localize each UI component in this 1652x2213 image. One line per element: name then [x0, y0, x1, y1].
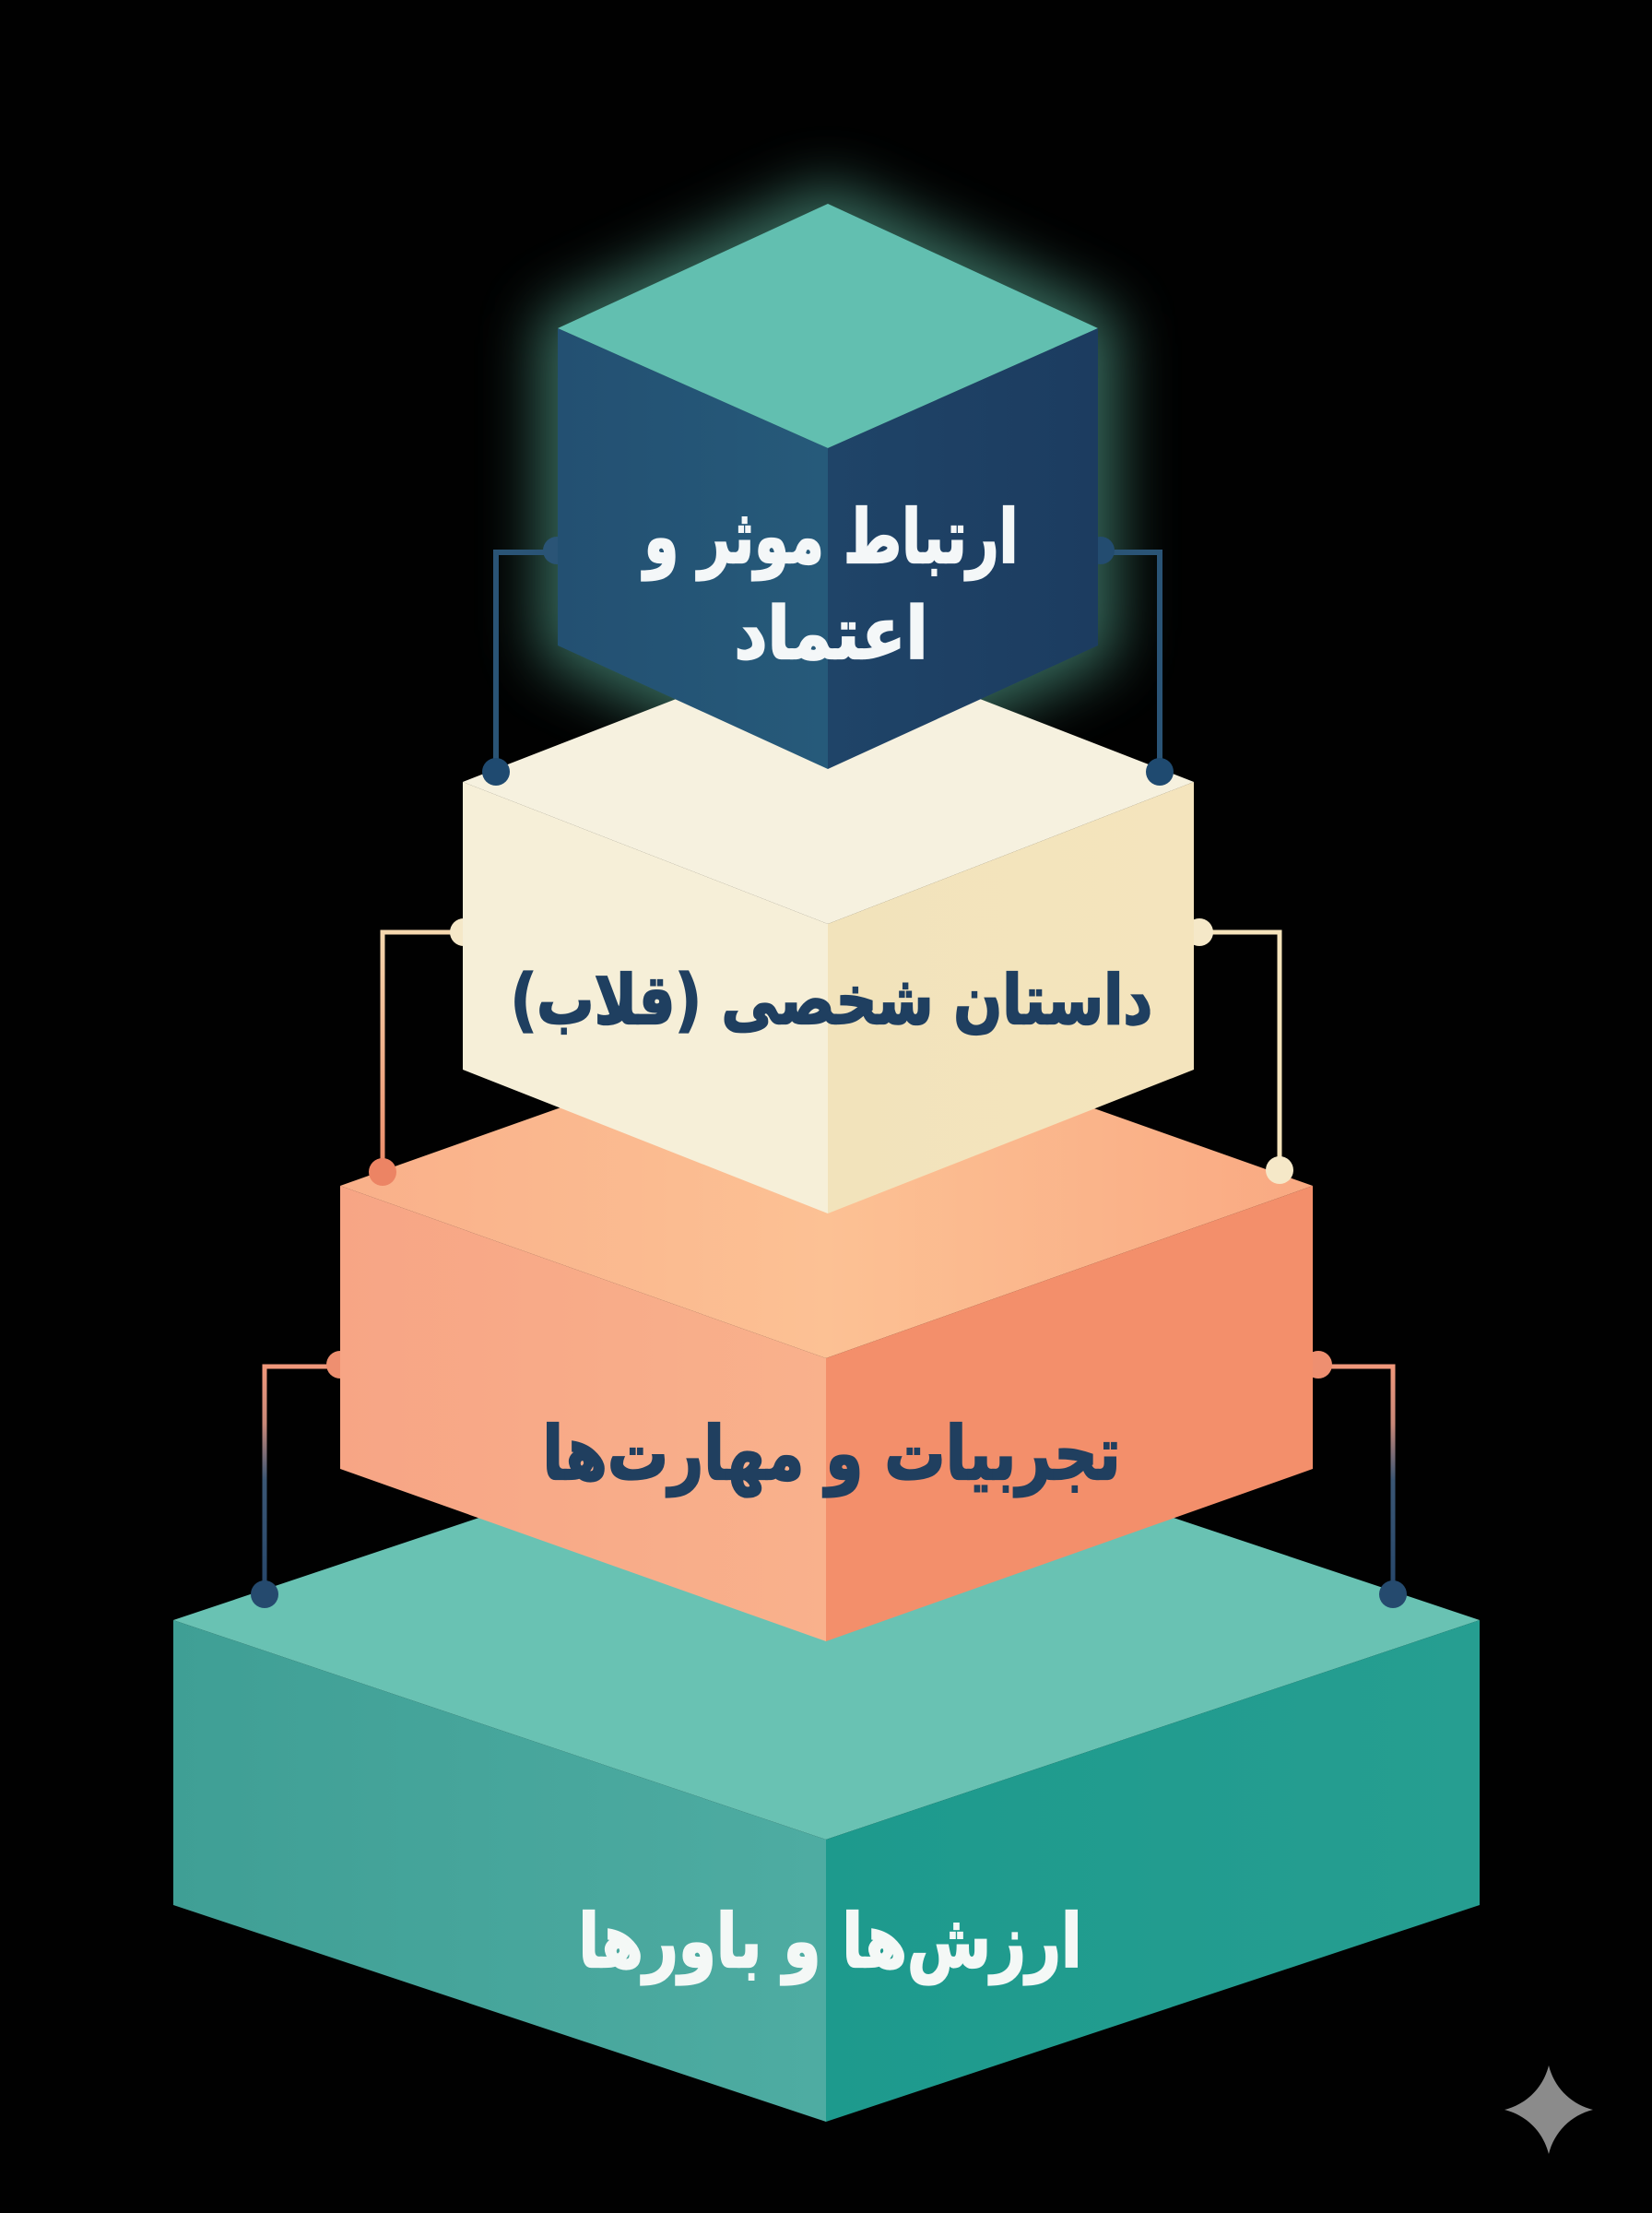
label: values and beliefs: ارزش‌ها و باورها [578, 1899, 1082, 1986]
block: values and beliefs [173, 1402, 1480, 2122]
block: experience and skills [340, 1013, 1313, 1641]
connector: left cream to orange [369, 918, 478, 1186]
block: effective communication and trust [558, 204, 1098, 769]
connector: right cream to orange [1186, 918, 1293, 1184]
label: personal story: داستان شخصی (قلاب) [511, 962, 1152, 1040]
block: personal story [463, 640, 1194, 1213]
connector: left top cube to cream [482, 537, 571, 786]
connector: right teal to orange [1304, 1351, 1407, 1608]
glow behind top cube [558, 204, 1098, 769]
label: experience and skills: تجربیات و مهارت‌ها [542, 1412, 1121, 1498]
block: effective communication and trust: اعتماد [734, 593, 928, 676]
icon: sparkle watermark [1504, 2065, 1593, 2154]
label: effective communication and trust: ارتباط موثر و [642, 494, 1018, 581]
connector: left teal to orange [251, 1351, 354, 1608]
connector: right top cube to cream [1087, 537, 1174, 786]
